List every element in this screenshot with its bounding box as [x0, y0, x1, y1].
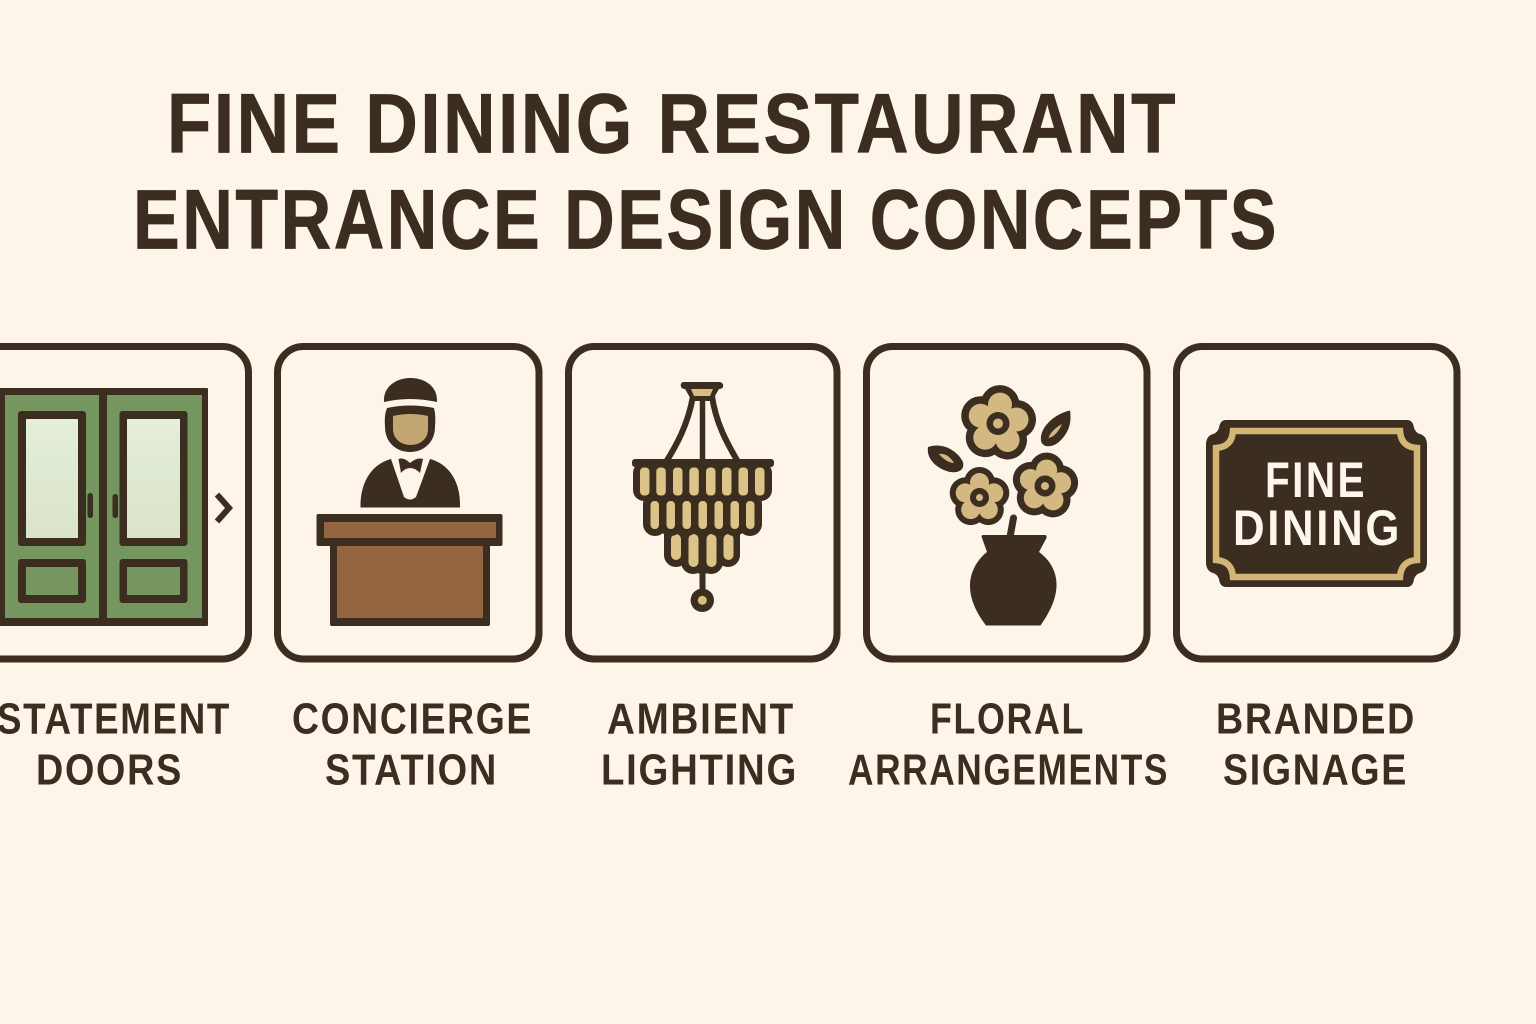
label: statement doors: STATEMENT: [0, 694, 231, 744]
icon: flowers in vase: [928, 381, 1081, 626]
title: FINE DINING RESTAURANT: [167, 76, 1178, 170]
label: concierge station: [292, 694, 533, 794]
icon: double doors: [0, 388, 208, 626]
panel: branded signage: [1176, 346, 1457, 794]
icon: chandelier: [632, 382, 774, 612]
label: concierge station: STATION: [325, 746, 498, 794]
title: ENTRANCE DESIGN CONCEPTS: [133, 172, 1279, 266]
panel: ambient lighting: [568, 346, 837, 794]
label: ambient lighting: [601, 694, 798, 794]
label: floral arrangements: [848, 694, 1169, 794]
label: statement doors: [0, 694, 231, 794]
label: branded signage: BRANDED: [1216, 694, 1416, 744]
panel: concierge station: [278, 346, 539, 794]
card frame: branded signage: [1176, 346, 1457, 659]
label: floral arrangements: FLORAL: [930, 694, 1085, 744]
chandelier tier 3: [664, 525, 740, 574]
icon: fine dining sign: [1206, 420, 1427, 587]
label: concierge station: CONCIERGE: [292, 694, 533, 744]
chandelier tier 2: [643, 492, 762, 536]
chandelier tier 1: [632, 459, 774, 501]
label: floral arrangements: ARRANGEMENTS: [848, 746, 1169, 794]
icon: fine dining sign: FINE: [1265, 452, 1367, 508]
panel: floral arrangements: [848, 346, 1169, 794]
label: ambient lighting: LIGHTING: [601, 746, 798, 794]
flower: left: [950, 467, 1009, 525]
title: [133, 76, 1279, 266]
panel: statement doors: [0, 346, 248, 794]
stem: [1010, 518, 1014, 537]
icon: chevron arrow: [217, 494, 229, 522]
label: statement doors: DOORS: [36, 746, 183, 794]
label: branded signage: [1216, 694, 1416, 794]
icon: concierge at desk: [316, 378, 502, 626]
icon: fine dining sign: DINING: [1233, 500, 1402, 556]
card frame: concierge station: [278, 346, 539, 659]
label: ambient lighting: AMBIENT: [607, 694, 795, 744]
card frame: floral arrangements: [866, 346, 1147, 659]
leaf: right: [1041, 410, 1071, 446]
flower: top: [957, 381, 1039, 462]
card frame: ambient lighting: [568, 346, 837, 659]
leaf: left: [928, 445, 963, 472]
flower: right: [1009, 449, 1081, 520]
card frame: statement doors: [0, 346, 248, 659]
vase: [970, 535, 1057, 626]
label: branded signage: SIGNAGE: [1223, 746, 1408, 794]
